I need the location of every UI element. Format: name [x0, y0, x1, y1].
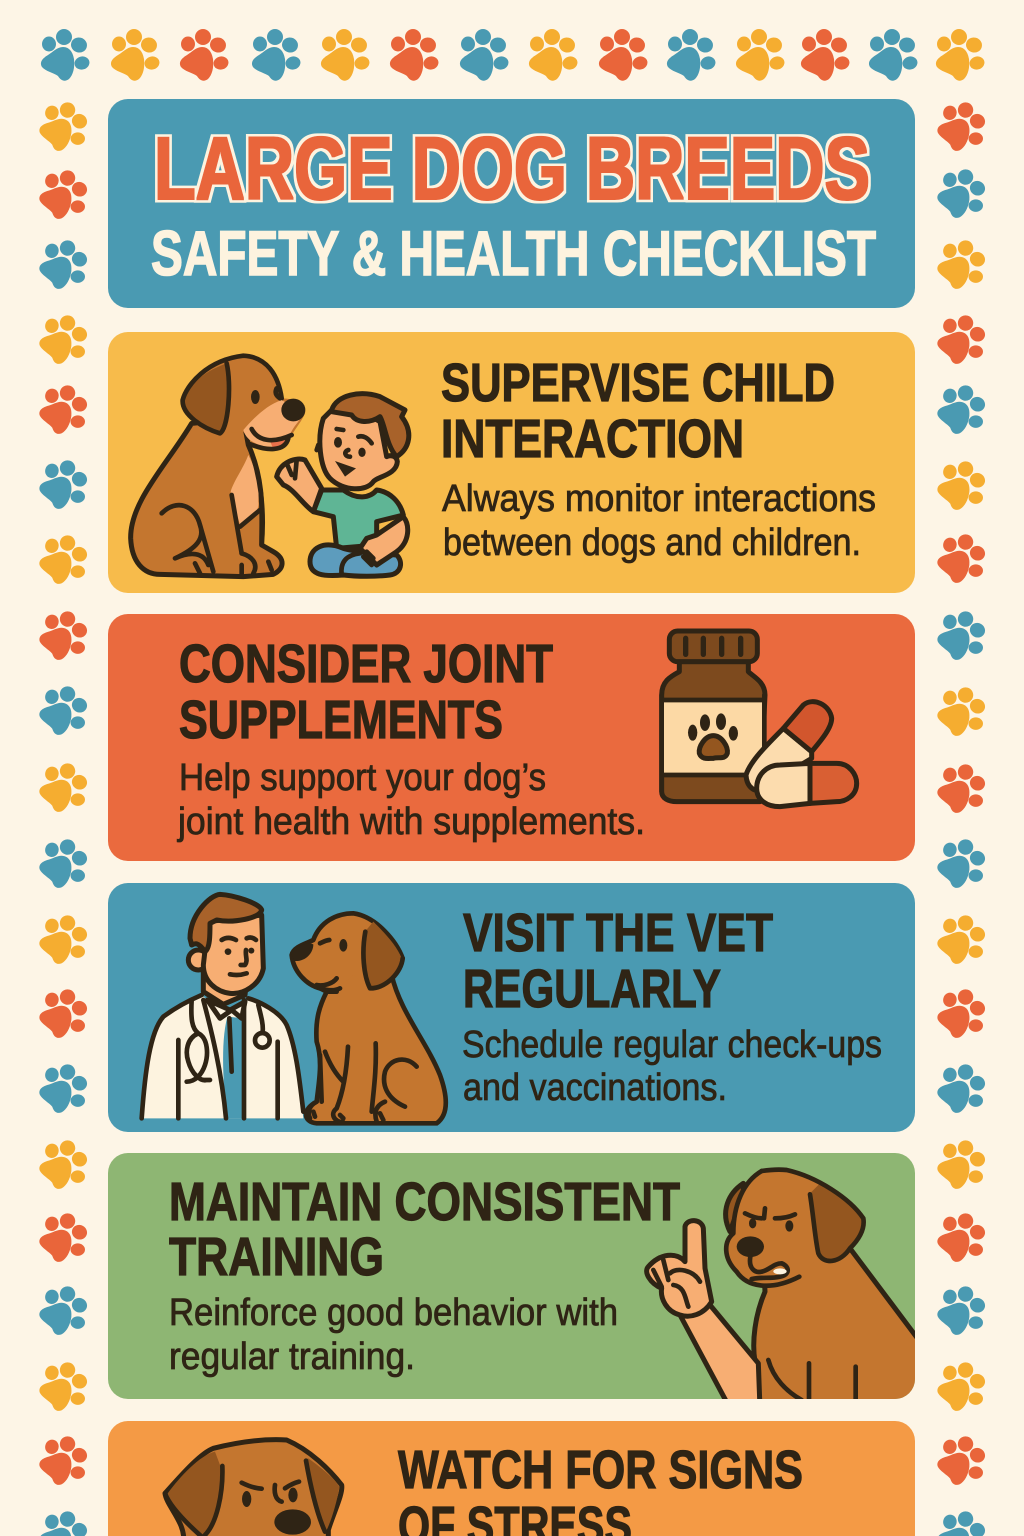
dog — [292, 913, 446, 1123]
capsules — [746, 702, 857, 807]
description: Reinforce good behavior with — [169, 1292, 618, 1334]
panel: maintain consistent training — [108, 1153, 930, 1408]
paw row: top — [41, 29, 986, 81]
panel: title banner — [108, 99, 915, 308]
hand — [647, 1221, 760, 1408]
description: Always monitor interactions — [442, 478, 876, 520]
paw column: right — [933, 97, 993, 1536]
heading: SUPERVISE CHILD — [441, 353, 835, 413]
stern dog — [726, 1170, 930, 1408]
illustration: dog and child — [131, 356, 409, 577]
heading: TRAINING — [169, 1227, 384, 1287]
description — [442, 478, 876, 564]
panel: consider joint supplements — [108, 614, 915, 861]
heading — [398, 1440, 803, 1536]
heading: WATCH FOR SIGNS — [398, 1440, 803, 1500]
description: and vaccinations. — [463, 1067, 727, 1109]
description — [177, 757, 645, 843]
heading: SUPPLEMENTS — [179, 690, 503, 750]
description: joint health with supplements. — [177, 801, 645, 843]
paw column: left — [35, 97, 95, 1536]
description: Schedule regular check-ups — [462, 1024, 882, 1066]
child — [277, 394, 409, 576]
heading: MAINTAIN CONSISTENT — [169, 1172, 680, 1232]
heading: VISIT THE VET — [463, 903, 773, 963]
description — [169, 1292, 618, 1378]
heading: INTERACTION — [441, 409, 744, 469]
heading — [179, 634, 553, 750]
illustration: stressed dog — [165, 1440, 342, 1536]
description: Help support your dog’s — [179, 757, 546, 799]
description: between dogs and children. — [443, 522, 861, 564]
bottle — [662, 631, 765, 802]
panel: watch for signs of stress — [108, 1421, 915, 1536]
icon: supplement bottle and capsules — [662, 631, 857, 807]
panel: visit the vet regularly — [108, 883, 915, 1132]
heading — [441, 353, 835, 469]
illustration: hand and stern dog — [647, 1170, 930, 1408]
vet — [140, 894, 303, 1118]
heading: CONSIDER JOINT — [179, 634, 553, 694]
heading — [169, 1172, 680, 1287]
dog — [131, 356, 305, 577]
panel: supervise child interaction — [108, 332, 915, 593]
description — [462, 1024, 882, 1109]
illustration: vet and dog — [140, 894, 446, 1123]
heading — [463, 903, 773, 1019]
description: regular training. — [169, 1336, 415, 1378]
heading: REGULARLY — [463, 959, 721, 1019]
